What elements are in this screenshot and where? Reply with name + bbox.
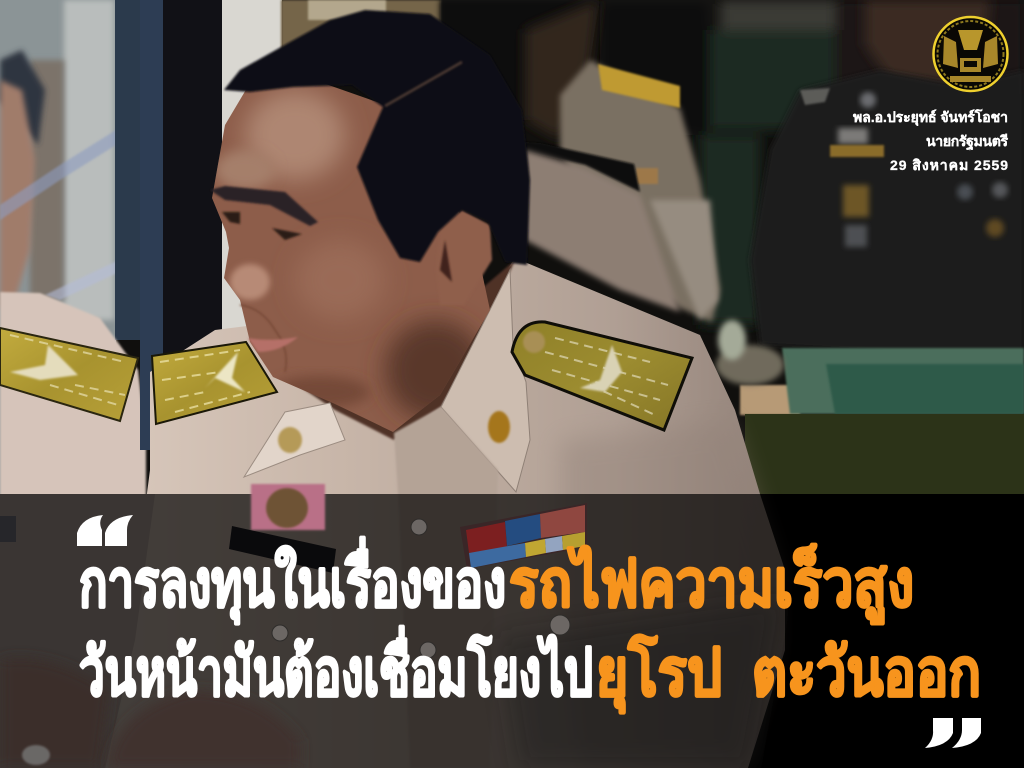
shirt shadow folds [500,600,780,768]
hand on the table [108,690,300,768]
opening quotation mark [77,515,133,546]
right collar [441,270,530,492]
ear [436,210,492,305]
mouth [248,337,298,352]
badge [251,484,325,530]
quote line 2 [79,625,981,714]
face [212,84,490,432]
right epaulet [512,322,692,430]
left epaulet [152,342,277,424]
uniform [100,258,785,768]
window frame [140,0,223,450]
quote line 2: ยุโรป [596,633,722,714]
closing quotation mark [925,718,981,748]
name plate [229,526,336,573]
quote line 1: รถไฟความเร็วสูง [509,543,914,625]
background: officer in dark uniform [750,0,1024,360]
cheek crease [240,305,286,372]
shirt buttons [272,519,570,658]
left reflection under overlay [0,494,155,768]
arm shadow [560,420,780,768]
table with tablecloth [716,320,1024,494]
shirt placket [394,407,498,768]
background: dark green wall [600,0,1024,325]
neck [290,260,515,440]
speaker credit: พล.อ.ประยุทธ์ จันทร์โอชา [853,108,1008,126]
window with reflection [0,0,146,500]
background: officer in beige [440,0,720,322]
hair parting [385,62,462,106]
wall behind head [222,0,441,340]
eyes [222,212,302,240]
speaker credit [853,108,1008,173]
dark caption overlay [0,494,1024,768]
reflected epaulet [0,328,138,421]
left collar [244,403,345,477]
eyebrow [210,186,318,226]
hair [224,10,530,265]
government seal [934,17,1008,91]
collar pin left [278,427,302,453]
quote line 2: วันหน้ามันต้องเชื่อมโยงไป [79,625,593,709]
photo: man in profile [100,10,785,768]
speaker credit: 29 สิงหาคม 2559 [890,157,1008,173]
medal ribbons [460,503,587,569]
quote line 2: ตะวันออก [752,635,981,709]
quote line 1 [79,536,914,625]
quote line 1: การลงทุนในเรื่องของ [79,536,506,625]
speaker credit: นายกรัฐมนตรี [926,133,1008,151]
collar pin right [488,411,510,443]
